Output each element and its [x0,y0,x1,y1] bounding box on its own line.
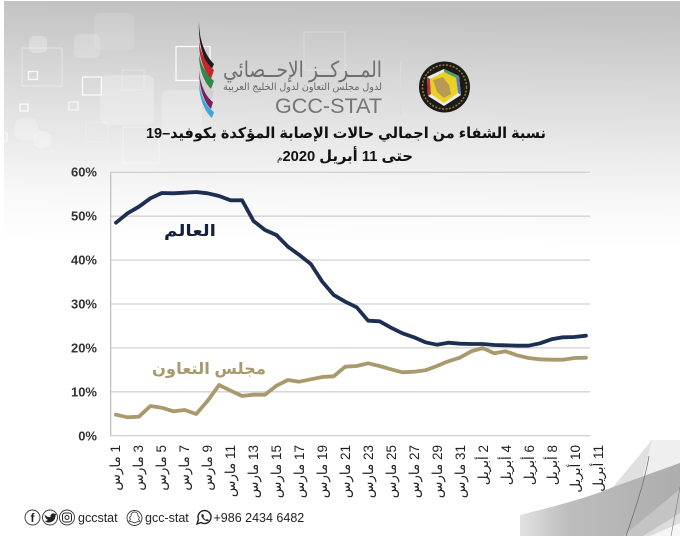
logo: Arabic subtitle: لدول مجلس التعاون لدول الخليج العربية [223,82,382,93]
y axis labels: 50% [71,208,97,224]
chart [71,164,607,498]
x axis labels: 2 أبريل [474,445,492,485]
x axis labels: 27 مارس [407,445,423,498]
plot area [111,172,590,436]
x axis labels: 9 مارس [200,445,216,491]
x axis labels: 15 مارس [269,445,285,498]
GCC series label: مجلس التعاون [152,361,266,378]
x axis labels: 3 مارس [131,445,147,491]
x axis labels: 6 أبريل [520,445,538,485]
x axis labels: 1 مارس [108,445,124,491]
background gradient [4,1,680,241]
y axis labels: 20% [71,340,97,356]
x axis labels: 4 أبريل [497,445,515,485]
icon: whatsapp [197,511,211,524]
x axis labels: 7 مارس [177,445,193,491]
y axis labels: 30% [71,296,97,312]
x axis labels: 5 مارس [154,445,170,491]
x axis labels: 17 مارس [292,445,308,498]
y axis labels: 10% [71,384,97,400]
x axis labels: 19 مارس [315,445,331,498]
GCC line [116,348,586,417]
y axis labels [71,164,97,444]
icon: snapchat [127,510,142,526]
world line [116,192,586,346]
y axis labels: 0% [78,428,97,444]
x axis labels: 8 أبريل [543,445,561,485]
x axis labels: 31 مارس [453,445,469,498]
icon: facebook [25,510,40,525]
x axis labels: 11 مارس [223,445,239,497]
x axis labels: 29 مارس [430,445,446,498]
x axis labels: 11 أبريل [589,445,607,492]
x axis labels: 23 مارس [361,445,377,498]
emblem: GCC seal [419,62,470,112]
logo: GCC-STAT: GCC-STAT [275,95,382,118]
x axis labels: 25 مارس [384,445,400,498]
bottom-right decorative band [520,440,680,536]
logo divider [400,62,401,115]
title [146,125,546,165]
footer: social contacts [25,510,304,526]
y axis labels: 60% [71,164,97,180]
decorative squares [1,13,345,163]
logo: ribbon [199,21,214,118]
icon: instagram [60,510,74,525]
x axis labels: 10 أبريل [566,445,584,493]
y axis labels: 40% [71,252,97,268]
phone number: +986 2434 6482 [214,511,304,525]
x axis labels [108,445,607,498]
icon: facebook: f [30,511,36,525]
x axis labels: 21 مارس [338,445,354,498]
logo: Arabic name: المــركــز الإحــصائي [223,57,382,83]
world series label: العالم [164,223,216,240]
handle: gccstat: gccstat [78,511,118,525]
title: نسبة الشفاء من اجمالي حالات الإصابة المؤكدة بكوفيد–19 [146,125,546,142]
title: حتى 11 أبريل 2020م [277,146,413,165]
handle: gcc-stat: gcc-stat [145,511,189,525]
icon: twitter [42,510,58,525]
x axis labels: 13 مارس [246,445,262,498]
